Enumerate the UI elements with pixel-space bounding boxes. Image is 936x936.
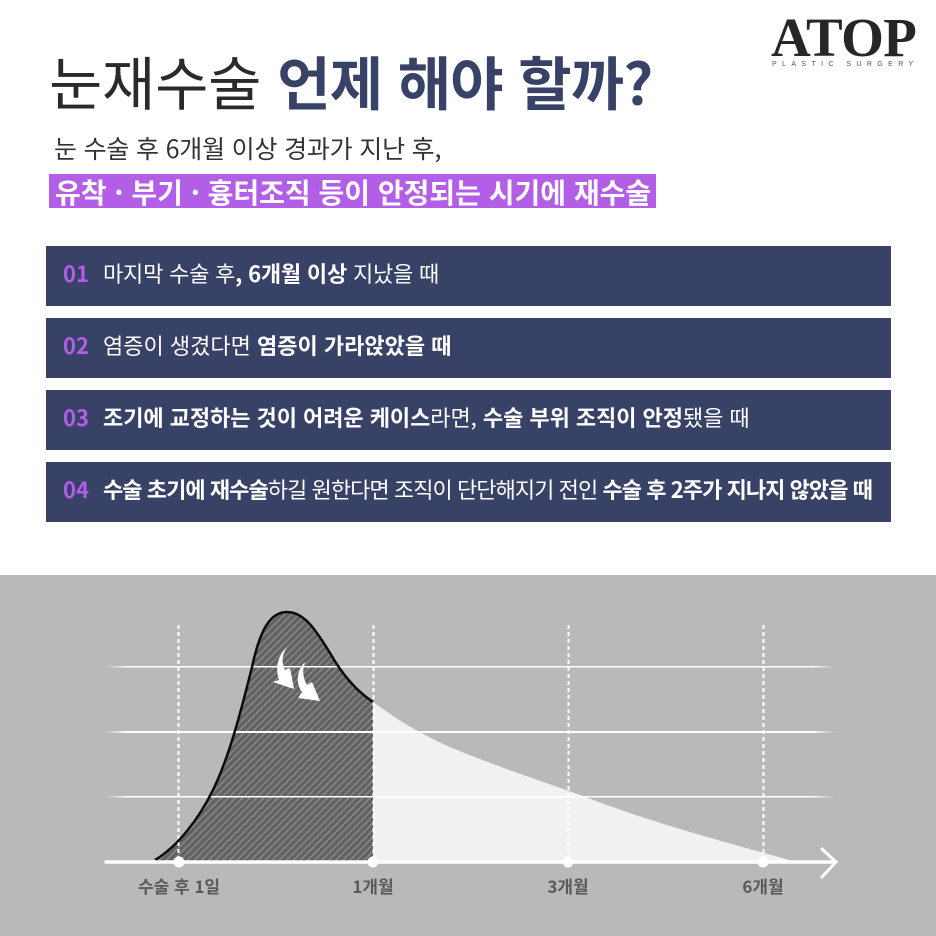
list item 04 [46,462,891,522]
icon: downward arrows [273,647,320,701]
list item 02: 02 [63,329,89,361]
list item 04: 수술 초기에 재수술하길 원한다면 조직이 단단해지기 전인 수술 후 2주가 지나지 않았을 때 [103,473,872,505]
axis labels: 1개월 [352,873,394,898]
list item 02: 염증이 생겼다면 염증이 가라앉았을 때 [103,329,452,361]
list item 03: 조기에 교정하는 것이 어려운 케이스라면, 수술 부위 조직이 안정됐을 때 [103,401,750,433]
list item 01 [46,246,891,306]
light recovery area [373,702,793,861]
time axis with arrow [106,849,836,877]
axis labels [138,873,784,898]
list item 03: 03 [63,401,89,433]
grid lines over dark area [209,666,373,798]
subtitle: 눈 수술 후 6개월 이상 경과가 지난 후, [54,130,441,166]
horizontal grid lines [105,666,835,798]
logo: ATOP plastic surgery: ATOP [771,7,916,68]
list item 04: 04 [63,473,89,505]
list item 01: 01 [63,257,89,289]
highlighted subtitle: 유착 · 부기 · 흉터조직 등이 안정되는 시기에 재수술 [55,172,651,212]
chart background [0,575,936,936]
dark swelling area [155,612,373,861]
list item 03 [46,390,891,450]
title: 눈재수술 언제 해야 할까? [49,38,652,122]
logo: ATOP plastic surgery: PLASTIC SURGERY [772,61,919,68]
list item 02 [46,318,891,378]
chart panel [0,575,936,936]
axis labels: 6개월 [742,873,784,898]
axis labels: 3개월 [547,873,589,898]
list item 01: 마지막 수술 후, 6개월 이상 지났을 때 [103,257,439,289]
vertical dashed guides [178,625,764,860]
swelling curve [155,612,373,860]
axis labels: 수술 후 1일 [138,873,220,898]
axis points [174,856,768,868]
